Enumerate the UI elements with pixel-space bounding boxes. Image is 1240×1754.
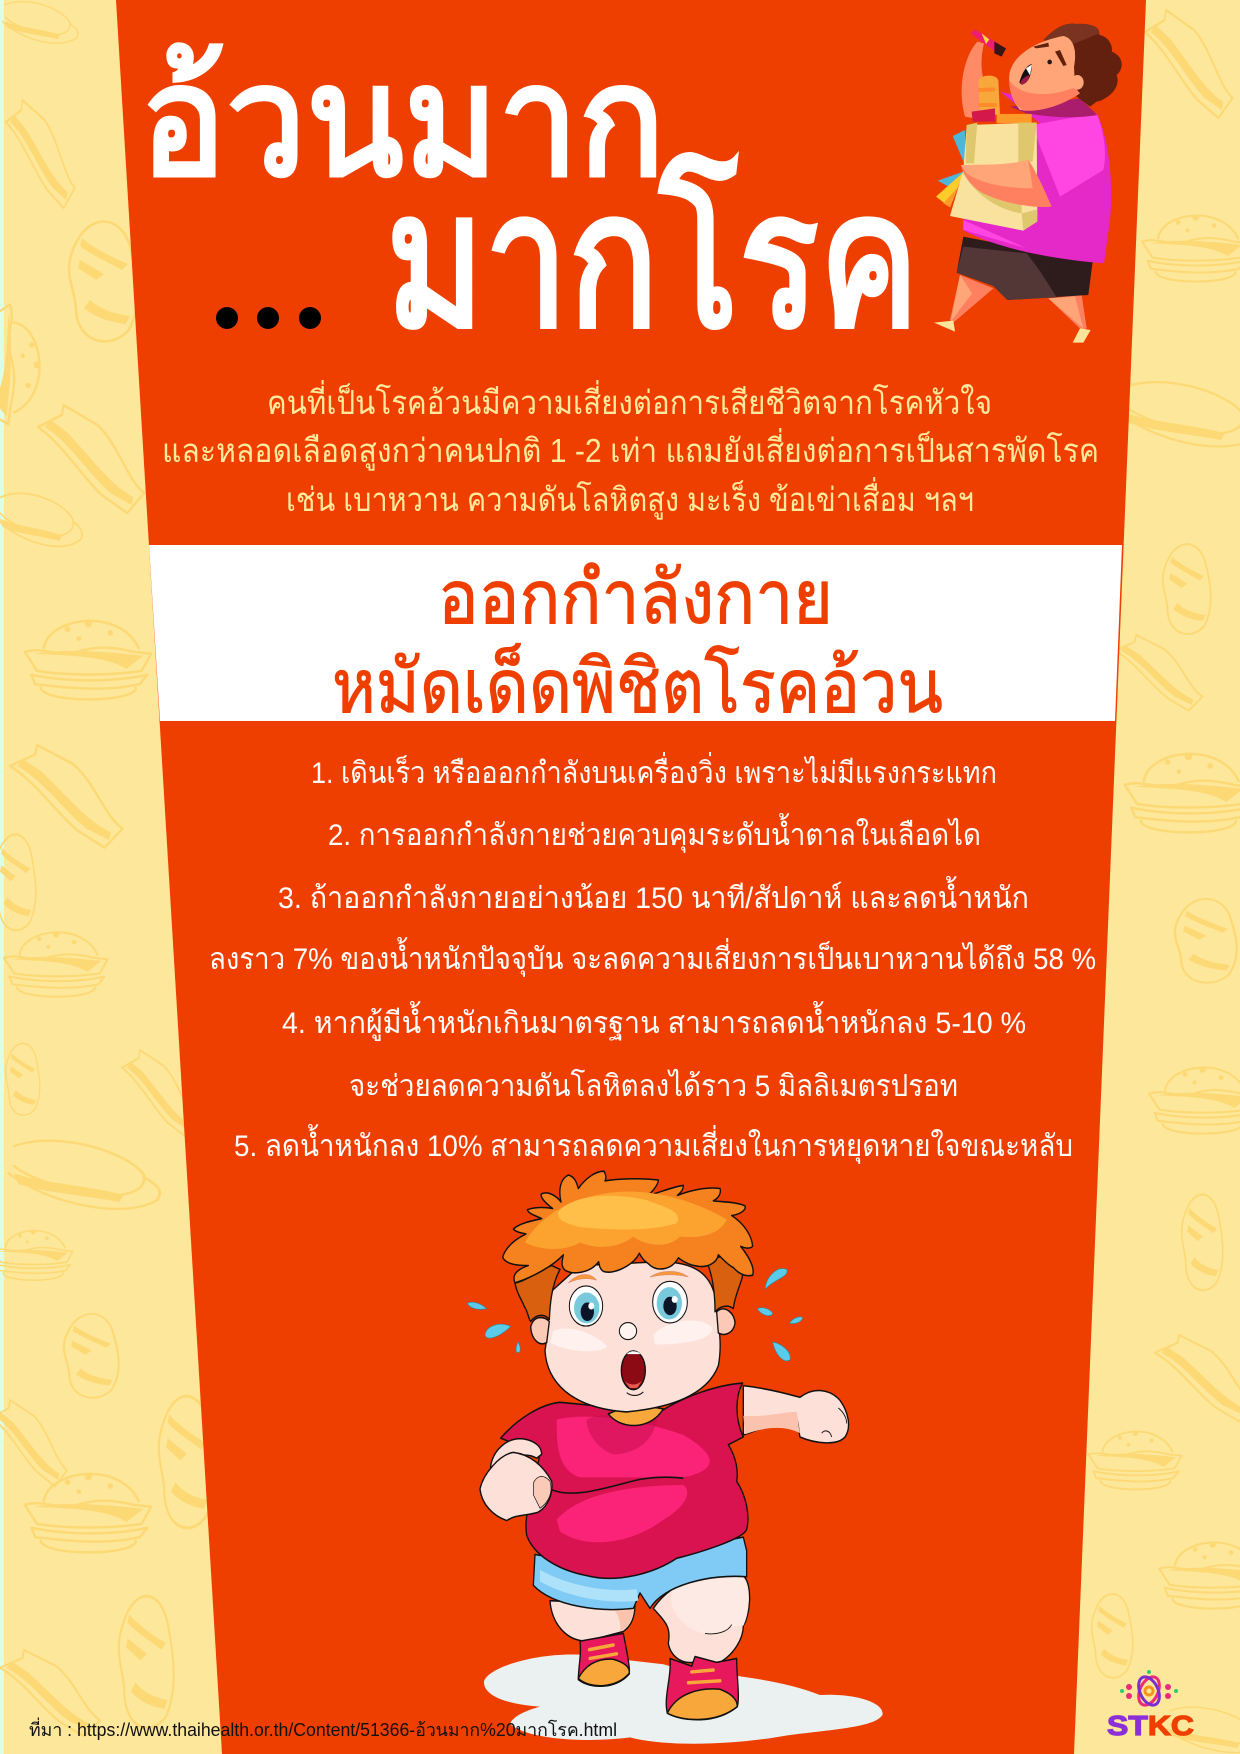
intro paragraph: และหลอดเลือดสูงกว่าคนปกติ 1 -2 เท่า แถมยังเสี่ยงต่อการเป็นสารพัดโรค: [162, 428, 1099, 471]
baguette: [978, 76, 1000, 115]
numbered list of exercise tips: จะช่วยลดความดันโลหิตลงได้ราว 5 มิลลิเมตรปรอท: [349, 1068, 958, 1103]
grocery bag: [950, 123, 1037, 231]
head: [545, 1262, 720, 1412]
title dots: [216, 307, 321, 329]
numbered list of exercise tips: [209, 752, 1096, 1165]
title line 2: มากโรค: [386, 150, 919, 367]
illustration: running boy: [467, 1171, 883, 1744]
numbered list of exercise tips: 5. ลดน้ำหนักลง 10% สามารถลดความเสี่ยงในการหยุดหายใจขณะหลับ: [234, 1124, 1073, 1165]
intro paragraph: [162, 380, 1099, 520]
left leg: [550, 1601, 635, 1641]
heading: exercise: หมัดเด็ดพิชิตโรคอ้วน: [332, 644, 943, 728]
mouth: [621, 1351, 645, 1390]
STKC logo: [1107, 1670, 1194, 1741]
numbered list of exercise tips: 3. ถ้าออกกำลังกายอย่างน้อย 150 นาที/สัปดาห์ และลดน้ำหนัก: [278, 876, 1029, 915]
numbered list of exercise tips: 1. เดินเร็ว หรือออกกำลังบนเครื่องวิ่ง เพราะไม่มีแรงกระแทก: [311, 752, 997, 790]
nose: [619, 1323, 637, 1340]
source line: ที่มา : https://www.thaihealth.or.th/Content/51366-อ้วนมาก%20มากโรค.html: [29, 1717, 617, 1740]
left shoe: [578, 1633, 629, 1686]
hair: [503, 1171, 753, 1283]
side hair: [515, 1254, 743, 1321]
snack bar: [971, 29, 1006, 57]
shirt: [501, 1383, 748, 1578]
shorts: [957, 237, 1093, 300]
ears: [531, 1318, 549, 1344]
logo atom mark: [1120, 1670, 1178, 1708]
cheeks: [550, 1329, 607, 1351]
front leg: [1048, 295, 1087, 330]
shorts: [533, 1537, 747, 1610]
face: [1009, 36, 1075, 110]
raised arm: [962, 42, 990, 120]
white heading band: [149, 545, 1122, 721]
illustration: overweight man with grocery bag: [934, 24, 1122, 343]
groceries on top: [972, 108, 995, 122]
ground puddle: [484, 1654, 883, 1744]
shirt: [963, 92, 1111, 263]
doodles: right strip: [1088, 10, 1240, 1753]
back leg: [950, 275, 993, 323]
eyebrows: [568, 1275, 597, 1283]
eyes: [569, 1286, 603, 1326]
right arm: [743, 1386, 849, 1443]
intro paragraph: คนที่เป็นโรคอ้วนมีความเสี่ยงต่อการเสียชีวิตจากโรคหัวใจ: [267, 380, 992, 421]
heading: exercise: [332, 556, 943, 728]
intro paragraph: เช่น เบาหวาน ความดันโลหิตสูง มะเร็ง ข้อเข่าเสื่อม ฯลฯ: [286, 477, 974, 520]
right leg: [653, 1572, 750, 1663]
sweat drops: [467, 1269, 803, 1361]
left arm: [491, 1439, 542, 1468]
hair: [1043, 24, 1122, 107]
doodles: left strip: [0, 2, 214, 1736]
collar: [608, 1406, 663, 1426]
heading: exercise: ออกกำลังกาย: [438, 556, 833, 639]
blue and yellow bags: [953, 130, 965, 165]
numbered list of exercise tips: 2. การออกกำลังกายช่วยควบคุมระดับน้ำตาลในเลือดได: [328, 813, 981, 854]
neck collar: [1010, 98, 1097, 117]
numbered list of exercise tips: 4. หากผู้มีน้ำหนักเกินมาตรฐาน สามารถลดน้ำหนักลง 5-10 %: [282, 1001, 1026, 1041]
right shoe: [666, 1657, 738, 1720]
numbered list of exercise tips: ลงราว 7% ของน้ำหนักปัจจุบัน จะลดความเสี่ยงการเป็นเบาหวานได้ถึง 58 %: [209, 937, 1096, 978]
title line 1: อ้วนมาก: [140, 35, 665, 209]
logo wordmark: STKC: [1107, 1710, 1194, 1741]
holding arm: [961, 160, 1052, 207]
